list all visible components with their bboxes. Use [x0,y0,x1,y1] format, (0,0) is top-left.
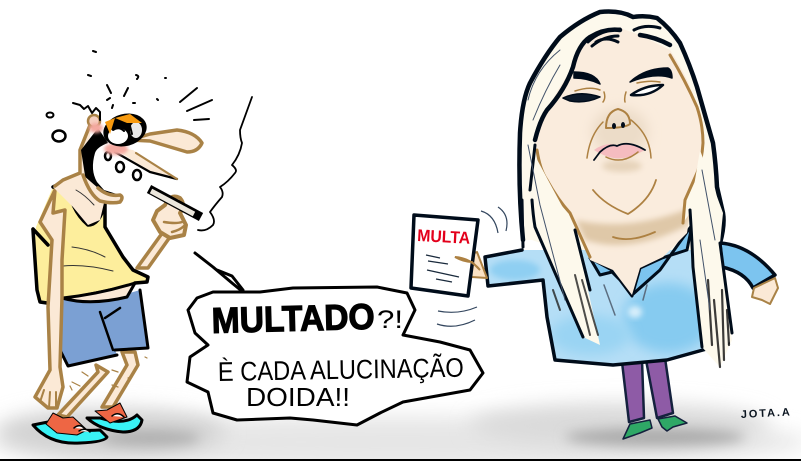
ground shadows [0,403,801,461]
woman collar [590,225,692,296]
beak upper line [136,153,177,179]
speech bubble [187,253,483,425]
motion lines [437,207,507,326]
woman hair outline [519,12,724,243]
man beak jaw [112,147,177,179]
man hanging arm [35,190,65,408]
man character [33,51,252,443]
woman right arm [720,243,778,304]
woman eyes [563,81,663,102]
man eyes and orange cap [100,109,150,151]
right shoe [87,403,142,432]
woman face [535,28,703,295]
woman character [455,12,778,439]
bubble line one: È CADA ALUCINAÇÃO [218,352,464,387]
man far leg [102,352,138,407]
bottom border [0,459,801,461]
man hand [153,197,186,238]
left shoe [33,413,107,443]
woman thumb [455,257,480,270]
woman hair left front [522,50,600,345]
woman lips [594,143,645,160]
bubble headline: MULTADO [211,296,375,341]
man belly [62,283,135,302]
bubble outline [187,253,483,425]
notice sheet [411,215,478,296]
man yellow tank top [33,180,148,303]
man lower jaw [83,175,122,203]
woman hair back [520,12,732,367]
neck wrinkle [76,190,94,205]
man ear [88,115,103,133]
man neck and shoulder [53,120,104,225]
fine notice [411,215,480,296]
woman eyebrows [574,68,672,84]
man shorts [60,290,148,366]
beak lines [115,152,177,179]
woman nose [587,92,651,158]
woman blue shirt [485,250,728,365]
notice heading: MULTA [417,226,471,248]
woman hair parting tuft [588,26,660,46]
man near leg [58,365,108,417]
man teeth [105,152,141,180]
man open mouth [81,128,120,201]
cheek blush [104,143,128,155]
man nose [130,130,202,152]
woman hand [455,252,487,278]
woman legs [622,358,673,422]
woman hair right front [690,150,732,367]
notice lines [426,255,459,282]
bubble punctuation: ?! [377,306,403,334]
man wiry hair [73,103,100,120]
bubble line two: DOIDA!! [246,382,350,412]
woman chin [593,180,656,239]
dizzy marks [46,51,212,142]
artist signature: JOTA.A [741,406,790,421]
man raised arm [137,232,170,268]
leg hairs [70,357,147,390]
smoke [198,97,252,230]
man hand fingers [164,222,184,232]
cigarette [149,189,201,217]
woman shoes [623,416,687,439]
woman hairline [535,30,670,140]
